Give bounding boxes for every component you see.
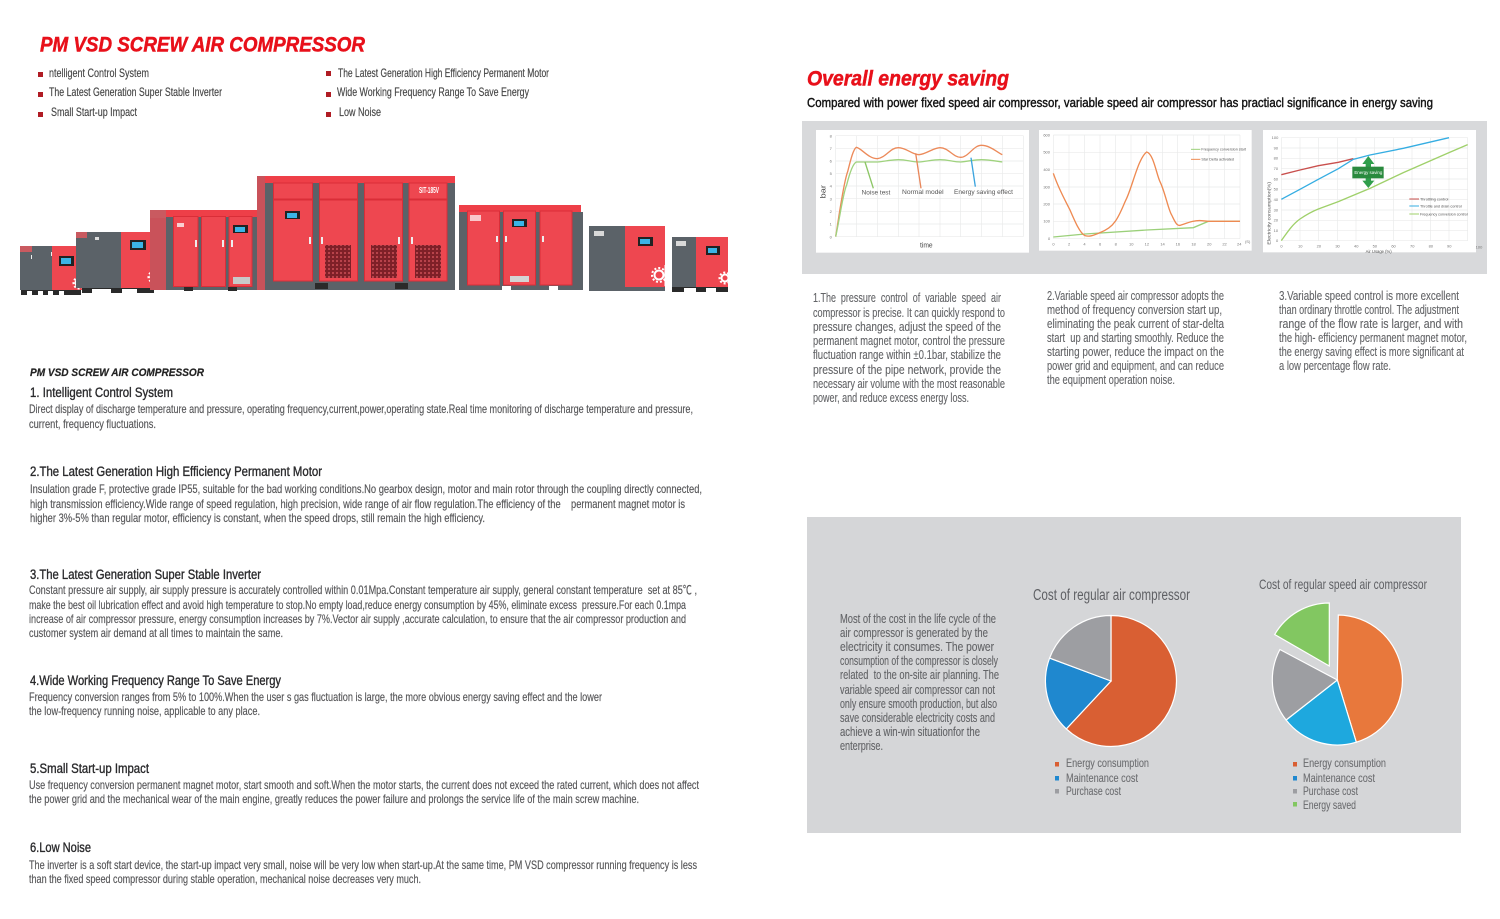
chart: energy saving by air usage: 60 (1274, 176, 1279, 181)
chart: pressure over time: 3 (830, 196, 833, 201)
chart: energy saving by air usage: Throttle and drain control (1420, 203, 1462, 208)
chart: start-up current: 20 (1207, 241, 1212, 246)
feature 6: The inverter is a soft start device, the start-up impact very small, noise will be very low when start-up.At the same time, PM VSD compressor running frequency is less (29, 858, 697, 872)
chart: energy saving by air usage: 30 (1335, 243, 1341, 248)
chart: energy saving by air usage: Energy saving (1354, 170, 1383, 176)
explanation column 2: power grid and equipment, and can reduce (1047, 359, 1224, 373)
feature bullet list: The Latest Generation High Efficiency Permanent Motor (338, 66, 549, 80)
compressor 2 (76, 232, 160, 293)
feature bullet list: The Latest Generation Super Stable Inverter (49, 85, 222, 99)
chart: start-up current: 8 (1115, 241, 1118, 246)
chart: energy saving by air usage: Electricity consumption(%) (1266, 181, 1271, 245)
explanation column 2: start up and starting smoothly. Reduce the (1047, 331, 1224, 345)
explanation column 1: permanent magnet motor, control the pressure (813, 334, 1005, 348)
chart: pressure over time: 0 (830, 234, 833, 239)
pie heading: speed: Cost of regular speed air compressor (1259, 576, 1427, 592)
chart: energy saving by air usage: 20 (1317, 243, 1322, 248)
panel: charts band (802, 121, 1487, 274)
chart: start-up current: 18 (1191, 241, 1197, 246)
explanation column 1: power, and reduce excess energy loss. (813, 391, 969, 405)
chart: pressure over time: bar (819, 184, 828, 198)
cost explanation text: variable speed air compressor can not (840, 683, 995, 697)
chart: pressure over time: 8 (830, 133, 833, 138)
compressor 4 (largest): SIT-185V (419, 186, 439, 195)
chart: energy saving by air usage: 100 (1272, 135, 1279, 140)
cost explanation text: enterprise. (840, 739, 883, 753)
details heading: PM VSD SCREW AIR COMPRESSOR (30, 367, 204, 379)
feature 1 (29, 385, 693, 431)
chart: start-up current: (S) (1245, 239, 1251, 244)
chart: energy saving by air usage: 80 (1274, 156, 1279, 161)
chart: energy saving by air usage: 90 (1274, 145, 1279, 150)
explanation column 1: pressure changes, adjust the speed of the (813, 320, 1001, 334)
explanation column 1: 1.The pressure control of variable speed air (813, 291, 1001, 305)
chart: start-up current: 200 (1043, 201, 1051, 206)
chart: energy saving by air usage: 70 (1410, 243, 1415, 248)
energy saving subtitle: Compared with power fixed speed air compressor, variable speed air compressor has practiacl significance in energy saving (807, 95, 1433, 110)
explanation column 1: fluctuation range within ±0.1bar, stabilize the (813, 348, 1001, 362)
chart: pressure over time: 7 (830, 146, 833, 151)
explanation column 3: range of the flow rate is larger, and with (1279, 317, 1463, 331)
chart: energy saving by air usage: 50 (1274, 187, 1279, 192)
chart: pressure over time: 1 (830, 222, 833, 227)
feature 2: high transmission efficiency.Wide range of speed regulation, high precision, wide range of air flow regulation.The efficiency of the permanent magnet motor is (30, 497, 685, 511)
chart: start-up current: 400 (1043, 167, 1051, 172)
cost explanation text: save considerable electricity costs and (840, 711, 995, 725)
energy saving title: Overall energy saving (807, 68, 1009, 90)
chart: energy saving by air usage: 30 (1274, 207, 1279, 212)
chart: start-up current: 300 (1043, 184, 1051, 189)
explanation column 1: pressure of the pipe network, provide the (813, 363, 1001, 377)
feature 2: Insulation grade F, protective grade IP55, suitable for the bad working conditions.No gearbox design, motor and main rotor through the coupling directly connected, (30, 482, 702, 496)
explanation column 1 (813, 291, 1005, 405)
pie heading: regular: Cost of regular air compressor (1033, 587, 1190, 604)
compressor 6 (589, 226, 670, 291)
cost explanation text: only ensure smooth production, but also (840, 697, 997, 711)
chart: energy saving by air usage (1263, 130, 1483, 254)
chart: energy saving by air usage: Throttling control (1420, 196, 1448, 201)
chart: start-up current (1039, 130, 1252, 251)
pie chart: speed (1272, 603, 1402, 745)
feature 5: the power grid and the mechanical wear of the main engine, greatly reduces the power failure and prolongs the service life of the main screw machine. (29, 792, 639, 806)
pie chart: regular (1045, 616, 1176, 746)
cost explanation text: Most of the cost in the life cycle of the (840, 612, 996, 626)
chart: pressure over time: Normal model (902, 189, 944, 196)
chart: start-up current: 16 (1176, 241, 1181, 246)
feature 3: customer system air demand at all times to maintain the same. (29, 626, 283, 640)
feature 4 (29, 673, 602, 718)
chart: start-up current: 22 (1222, 241, 1228, 246)
explanation column 2: starting power, reduce the impact on the (1047, 345, 1224, 359)
chart: start-up current: 500 (1043, 150, 1051, 155)
compressor 5 (459, 205, 583, 290)
chart: energy saving by air usage: 80 (1429, 243, 1434, 248)
chart: pressure over time: 6 (830, 159, 833, 164)
compressor product line-up (20, 176, 734, 295)
chart: start-up current: 0 (1048, 236, 1051, 241)
chart: start-up current: 2 (1068, 241, 1071, 246)
legend: speed: Maintenance cost (1303, 771, 1376, 785)
chart: start-up current: 0 (1052, 241, 1055, 246)
feature 4: Frequency conversion ranges from 5% to 100%.When the user s gas fluctuation is large, the more obvious energy saving effect and the lower (29, 690, 602, 704)
feature 2: 2.The Latest Generation High Efficiency Permanent Motor (30, 464, 322, 479)
legend: speed (1293, 756, 1386, 812)
chart: start-up current: 600 (1043, 132, 1051, 137)
chart: start-up current: Star Delta activated (1201, 157, 1234, 162)
feature 2 (30, 464, 702, 525)
legend: regular (1055, 756, 1149, 798)
chart: pressure over time: Noise test (862, 189, 890, 196)
feature 6: than the fixed speed compressor during stable operation, mechanical noise decreases very much. (29, 872, 421, 886)
chart: start-up current: 10 (1129, 241, 1134, 246)
chart: energy saving by air usage: 0 (1280, 243, 1283, 248)
feature bullet list: Small Start-up Impact (51, 105, 137, 119)
chart: energy saving by air usage: 40 (1354, 243, 1359, 248)
explanation column 1: necessary air volume with the most reasonable (813, 377, 1005, 391)
feature 5: Use frequency conversion permanent magnet motor, start smooth and soft.When the motor starts, the current does not exceed the rated current, which does not affect (29, 778, 700, 792)
compressor 7 (672, 237, 734, 292)
cost explanation text: consumption of the compressor is closely (840, 654, 999, 668)
chart: start-up current: 12 (1145, 241, 1150, 246)
explanation column 2 (1047, 289, 1224, 387)
explanation column 2: 2.Variable speed air compressor adopts the (1047, 289, 1224, 303)
chart: pressure over time: 2 (830, 209, 833, 214)
feature 3: increase of air compressor pressure, energy consumption increases by 7%.Vector air supply ,accurate calculation, to ensure that the air compressor production and (29, 612, 686, 626)
feature 6: 6.Low Noise (30, 840, 91, 855)
legend: speed: Energy consumption (1303, 756, 1386, 770)
cost explanation text: related to the on-site air planning. The (840, 668, 999, 682)
chart: start-up current: 4 (1083, 241, 1086, 246)
chart: pressure over time (816, 130, 1029, 253)
feature 3: make the best oil lubrication effect and avoid high temperature to stop.No empty load,reduce energy consumption by 45%, eliminate excess pressure.For each 0.1mpa (29, 598, 686, 612)
chart: pressure over time: Energy saving effect (954, 189, 1013, 196)
feature 2: higher 3%-5% than regular motor, efficiency is constant, when the speed drops, still remain the high efficiency. (30, 511, 485, 525)
chart: energy saving by air usage: 20 (1274, 218, 1279, 223)
feature 1: 1. Intelligent Control System (30, 385, 173, 400)
explanation column 2: the equipment operation noise. (1047, 373, 1175, 387)
chart: energy saving by air usage: 70 (1274, 166, 1279, 171)
chart: pressure over time: 5 (830, 171, 833, 176)
feature 3: 3.The Latest Generation Super Stable Inverter (30, 567, 261, 582)
chart: start-up current: 100 (1043, 219, 1051, 224)
chart: energy saving by air usage: 0 (1276, 238, 1279, 243)
feature 1: Direct display of discharge temperature and pressure, operating frequency,current,power,operating state.Real time monitoring of discharge temperature and pressure, (29, 402, 693, 416)
feature 4: 4.Wide Working Frequency Range To Save Energy (30, 673, 281, 688)
chart: energy saving by air usage: 10 (1274, 228, 1279, 233)
main title: PM VSD SCREW AIR COMPRESSOR (40, 34, 366, 56)
legend: regular: Maintenance cost (1066, 771, 1139, 785)
compressor 1 (20, 246, 84, 295)
chart: energy saving by air usage: Frequency conversion control (1420, 211, 1468, 216)
feature 5: 5.Small Start-up Impact (30, 761, 149, 776)
feature bullet list: ntelligent Control System (49, 66, 149, 80)
feature bullet list: Low Noise (339, 105, 381, 119)
chart: start-up current: 14 (1160, 241, 1166, 246)
legend: speed: Purchase cost (1303, 784, 1358, 798)
chart: start-up current: 24 (1237, 241, 1242, 246)
feature 5 (29, 761, 700, 806)
chart: energy saving by air usage: Air Usage (%) (1366, 249, 1392, 254)
chart: energy saving by air usage: 60 (1391, 243, 1397, 248)
legend: regular: Purchase cost (1066, 784, 1121, 798)
compressor 4 (largest) (257, 176, 455, 290)
feature bullet list: Wide Working Frequency Range To Save Energy (337, 85, 529, 99)
chart: energy saving by air usage: 100 (1476, 245, 1483, 250)
feature 6 (29, 840, 697, 886)
chart: start-up current: Frequency conversion start (1201, 147, 1247, 152)
explanation column 1: compressor is precise. It can quickly respond to (813, 306, 1005, 320)
cost explanation text: electricity it consumes. The power (840, 640, 994, 654)
chart: energy saving by air usage: 10 (1298, 243, 1303, 248)
cost explanation text: achieve a win-win situationfor the (840, 725, 980, 739)
chart: pressure over time: time (920, 240, 933, 249)
feature 4: the low-frequency running noise, applicable to any place. (29, 704, 260, 718)
panel: cost comparison (807, 517, 1461, 833)
feature bullet list (38, 66, 549, 119)
explanation column 3 (1279, 289, 1467, 373)
compressor 3 (150, 210, 257, 291)
explanation column 3: a low percentage flow rate. (1279, 359, 1391, 373)
explanation column 2: method of frequency conversion start up, (1047, 303, 1222, 317)
feature 3: Constant pressure air supply, air supply pressure is accurately controlled within 0.01Mpa.Constant temperature air supply, general constant temperature set at 85℃ , (29, 583, 697, 597)
cost explanation text: air compressor is generated by the (840, 626, 988, 640)
chart: energy saving by air usage: 50 (1373, 243, 1378, 248)
chart: energy saving by air usage: 40 (1274, 197, 1279, 202)
explanation column 2: eliminating the peak current of star-delta (1047, 317, 1224, 331)
chart: energy saving by air usage: 90 (1447, 243, 1452, 248)
legend: speed: Energy saved (1303, 798, 1356, 812)
legend: regular: Energy consumption (1066, 756, 1149, 770)
cost explanation text (840, 612, 999, 753)
feature 1: current, frequency fluctuations. (29, 417, 156, 431)
chart: pressure over time: 4 (830, 184, 833, 189)
chart: start-up current: 6 (1099, 241, 1102, 246)
feature 3 (29, 567, 697, 640)
